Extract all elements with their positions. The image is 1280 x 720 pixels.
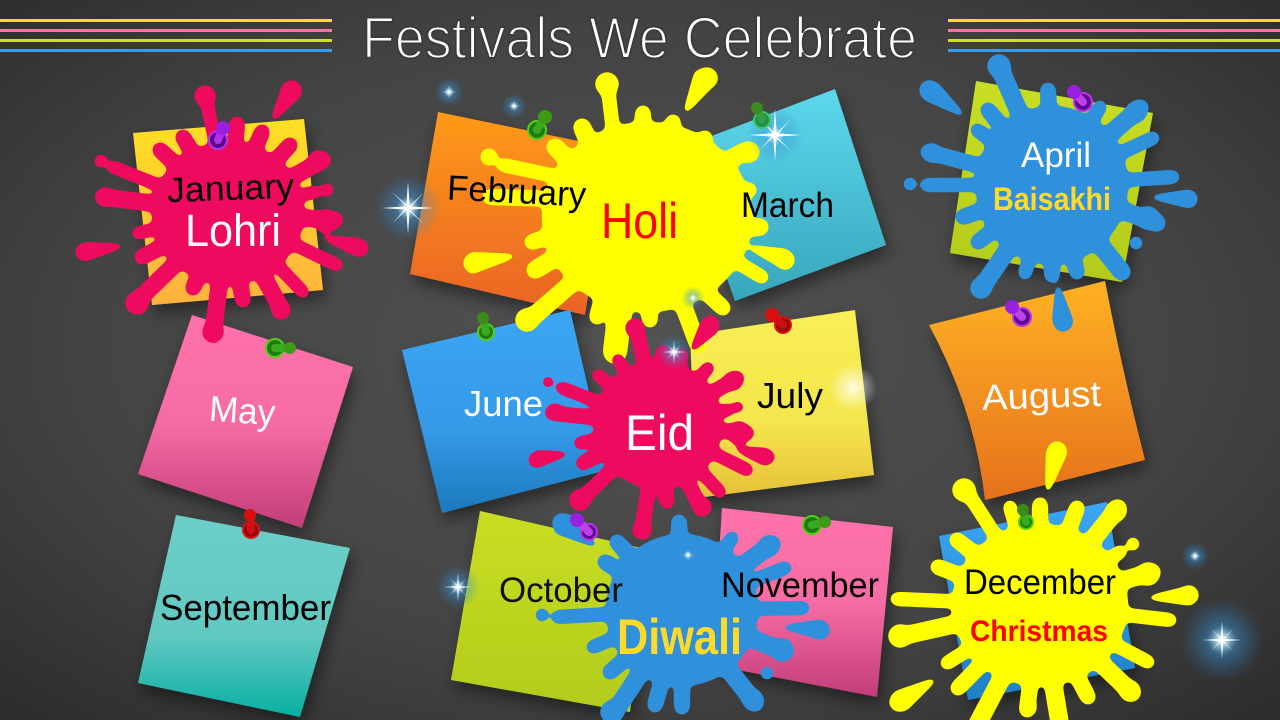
pin: green November	[803, 516, 831, 534]
title: Festivals We Celebrate	[362, 6, 917, 71]
pin: green March	[751, 102, 770, 128]
pin: green February	[528, 110, 552, 139]
sparkles	[374, 77, 1264, 682]
sparkle	[1181, 542, 1209, 570]
pin: red September	[243, 509, 259, 538]
sparkle	[374, 174, 442, 242]
note: September	[138, 515, 350, 717]
sparkle	[501, 93, 527, 119]
label: October: October	[499, 571, 623, 610]
pin: purple January	[209, 121, 230, 149]
note: August	[929, 281, 1145, 500]
note: June	[402, 310, 607, 513]
label: June: June	[464, 383, 543, 424]
sticky notes	[133, 81, 1153, 717]
label: March: March	[741, 186, 834, 225]
sparkle	[436, 565, 480, 609]
sparkle	[681, 286, 705, 310]
note: November	[712, 508, 893, 697]
sparkle	[1180, 598, 1264, 682]
label: Holi: Holi	[601, 193, 678, 249]
label: Baisakhi: Baisakhi	[993, 181, 1111, 217]
note: December	[939, 502, 1135, 700]
splat: Eid	[529, 316, 774, 539]
sparkle	[656, 334, 692, 370]
label: August: August	[981, 373, 1102, 418]
splat: Holi	[464, 68, 794, 352]
label: September: September	[160, 587, 331, 628]
label: Diwali: Diwali	[617, 609, 742, 665]
sparkle	[676, 543, 700, 567]
pins	[209, 85, 1092, 540]
note: March	[680, 89, 886, 301]
label: May: May	[208, 388, 277, 433]
label: January: January	[166, 167, 295, 210]
label: Christmas: Christmas	[970, 615, 1108, 648]
label: July: July	[757, 375, 823, 416]
sparkle	[747, 107, 803, 163]
note: July	[690, 310, 874, 498]
label: April: April	[1021, 136, 1091, 175]
splat: Diwali	[536, 514, 829, 720]
sparkle	[434, 77, 464, 107]
header lines: left	[0, 19, 332, 52]
pin: red July	[765, 308, 791, 333]
splat: Baisakhi	[904, 55, 1197, 331]
note: October	[451, 511, 650, 712]
pin: purple April	[1067, 85, 1092, 111]
splat: Christmas	[889, 442, 1198, 720]
pin: green December	[1017, 504, 1033, 529]
header lines: right	[948, 19, 1280, 52]
note: January	[133, 119, 323, 305]
label: December: December	[964, 563, 1116, 602]
label: February: February	[446, 168, 588, 215]
note: February	[410, 112, 612, 315]
label: Eid: Eid	[625, 405, 694, 461]
splat: Lohri	[76, 81, 368, 342]
note: April	[950, 81, 1153, 282]
pin: green May	[266, 339, 296, 357]
note: May	[138, 315, 353, 528]
pin: green June	[477, 312, 494, 340]
label: Lohri: Lohri	[185, 205, 281, 256]
pin: purple August	[1005, 300, 1031, 326]
sparkle: soft highlight on July	[829, 364, 877, 412]
label: November: November	[721, 566, 879, 605]
pin: purple October	[570, 513, 597, 540]
